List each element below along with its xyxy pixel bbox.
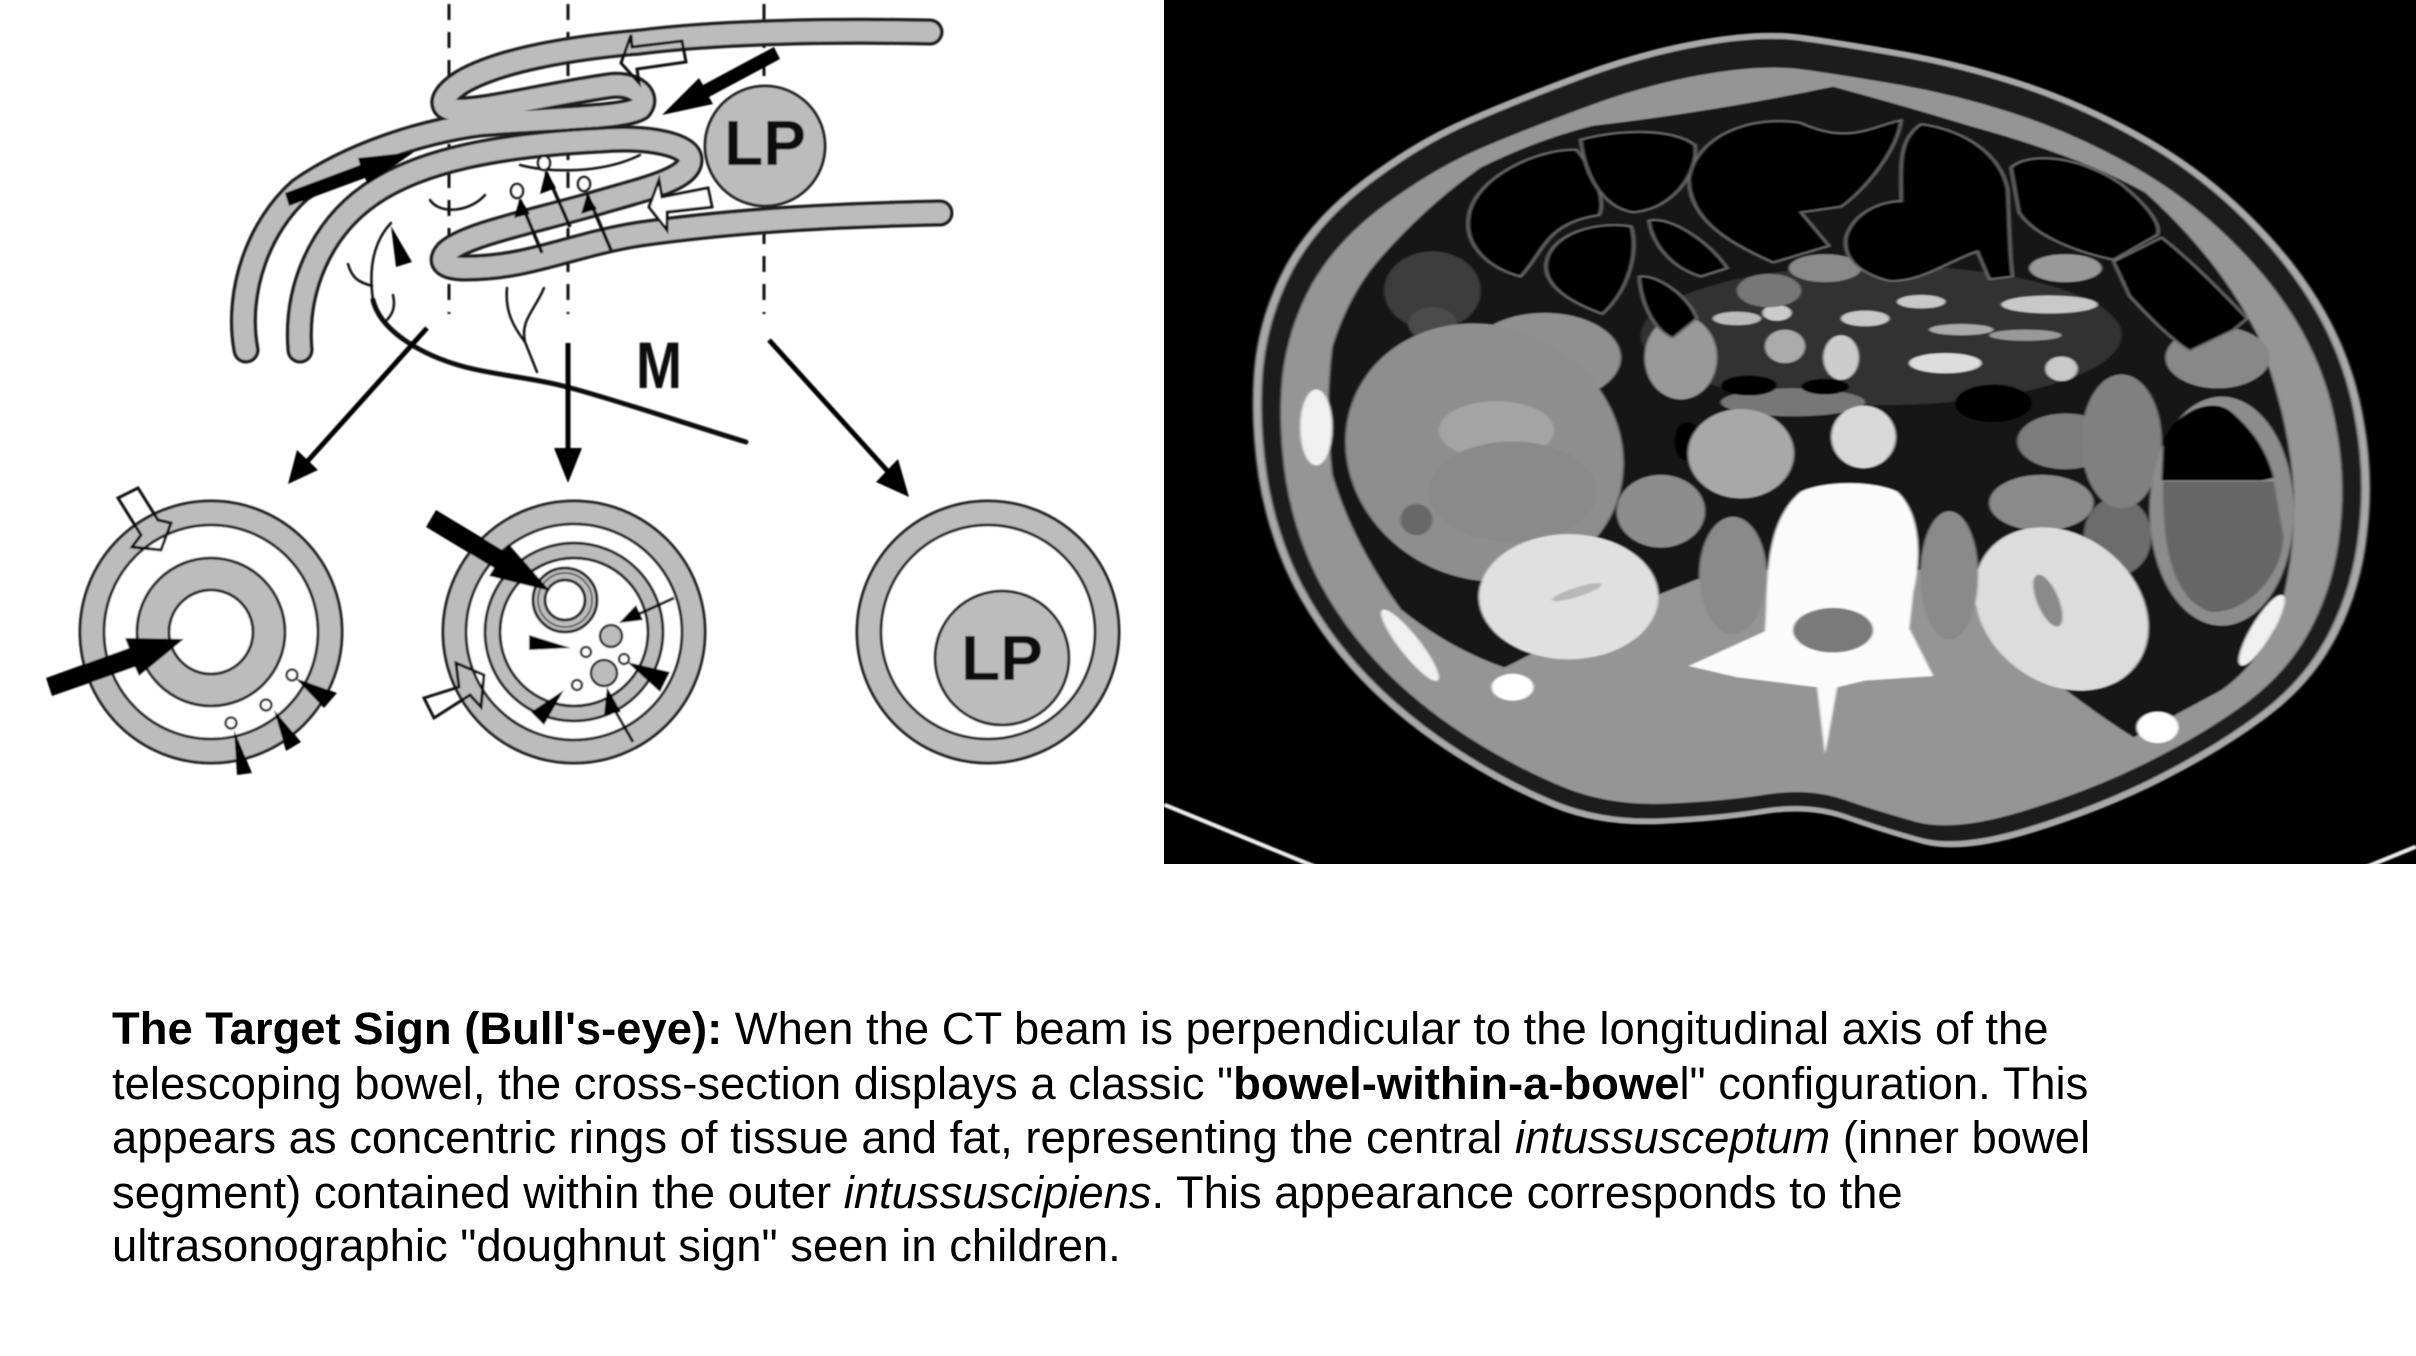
outer bowel tube <box>243 31 930 350</box>
text block: target sign explanation: The Target Sign (Bull's-eye): When the CT beam is perpendicular to the longitudinal axis of the <box>112 1003 2049 1054</box>
mesentery vessel <box>348 155 746 442</box>
text block: target sign explanation <box>112 1003 2090 1271</box>
wedge arrowhead <box>391 226 412 267</box>
open arrow <box>118 488 171 550</box>
pointer arrows to cross sections <box>288 328 909 497</box>
cross section 2 <box>424 501 705 763</box>
open arrow: upper <box>621 35 686 83</box>
wedges <box>234 678 337 775</box>
dashed section lines <box>449 4 764 314</box>
duodenum and IVC <box>1617 409 1794 548</box>
descending colon with air-fluid level <box>2150 397 2294 626</box>
inner bowel rings <box>533 568 597 632</box>
text block: target sign explanation: appears as concentric rings of tissue and fat, representing the central intussusceptum (inner bowel <box>112 1112 2090 1163</box>
black arrow: upper right <box>662 47 780 115</box>
vertebra <box>1689 483 1933 754</box>
cross section 1 <box>46 488 342 775</box>
left kidney <box>1946 511 2177 706</box>
small gas pockets <box>1674 375 2032 461</box>
cross section 3: lead point <box>857 501 1119 763</box>
black arrow <box>46 638 184 696</box>
black arrow: left tube <box>285 152 414 206</box>
vessels <box>572 625 629 690</box>
label M: M <box>636 328 682 402</box>
body wall layers <box>1253 33 2370 847</box>
small vessels <box>226 670 298 728</box>
text block: target sign explanation: ultrasonographic "doughnut sign" seen in children. <box>112 1220 1121 1271</box>
open arrow: lower <box>649 180 712 230</box>
inner bowel tube <box>299 139 940 350</box>
peritoneal fat <box>1328 87 2294 737</box>
panel: axial CT scan <box>1164 0 2416 864</box>
psoas muscles <box>1699 511 1978 640</box>
longitudinal section of telescoping bowel <box>243 4 940 442</box>
mesentery tissue and vessels <box>1384 251 2270 575</box>
small arrows <box>529 598 674 742</box>
right kidney <box>1444 510 1694 684</box>
ribs <box>1300 389 2293 743</box>
black arrow <box>426 510 550 591</box>
bowel gas loops <box>1468 120 2247 351</box>
panel: intussusception schematic diagram <box>45 2 1122 776</box>
open arrow <box>424 663 484 718</box>
text block: target sign explanation: segment) contained within the outer intussuscipiens. This appearance corresponds to the <box>112 1167 1903 1218</box>
cross section 3: lead point: LP <box>961 622 1043 694</box>
table lines <box>1164 805 2416 869</box>
mesenteric vessels with small arrows <box>511 156 611 253</box>
intussusception mass <box>1322 311 1647 594</box>
text block: target sign explanation: telescoping bowel, the cross-section displays a classic "bowel-within-a-bowel" configuration. This <box>112 1058 2088 1109</box>
lead point mass: LP <box>724 107 806 179</box>
aorta <box>1831 406 1896 468</box>
lead point mass <box>705 86 825 206</box>
CT image content <box>1164 33 2416 869</box>
